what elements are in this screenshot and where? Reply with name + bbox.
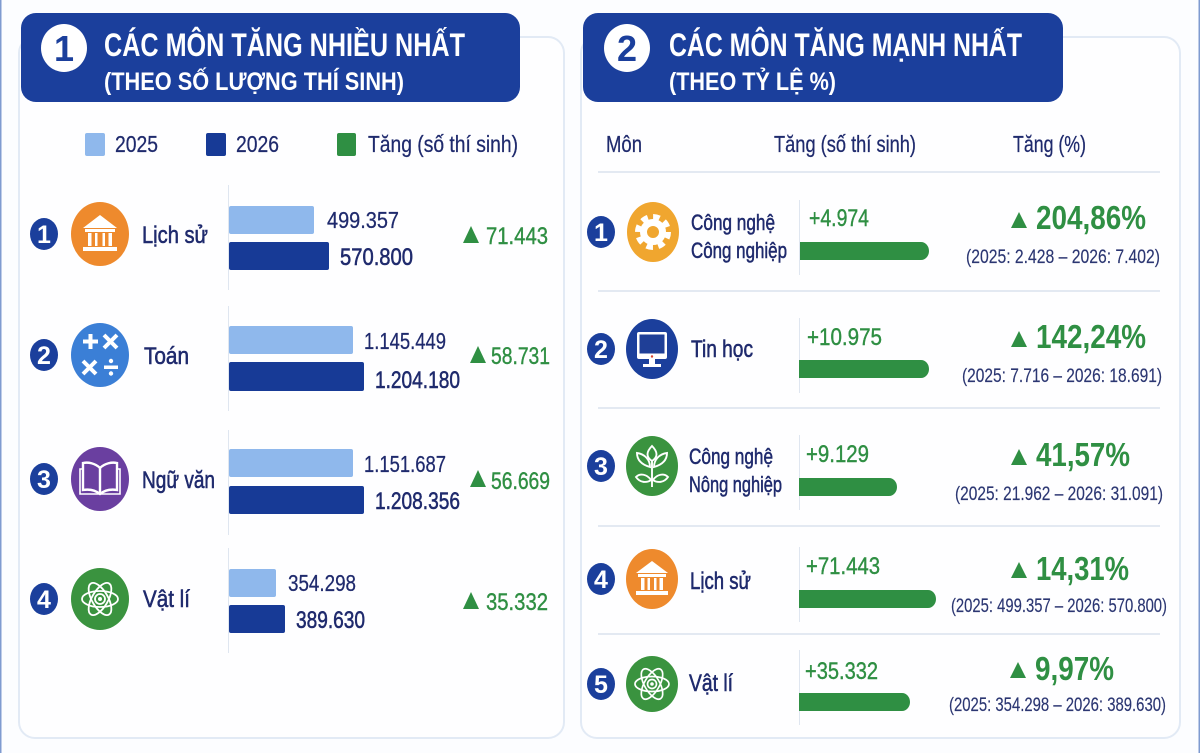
row: Lịch sử: 71.443 [486, 223, 548, 250]
row: Lịch sử percent: 4 [594, 566, 608, 594]
row: Vật lí percent: 9,97% [1035, 650, 1114, 687]
column headers [606, 131, 1086, 157]
row: Toán: 1.204.180 [375, 367, 460, 394]
row: Công nghệ Nông nghiệp: 41,57% [1036, 436, 1130, 473]
row: Công nghệ Công nghiệp [587, 199, 1160, 275]
row: Công nghệ Công nghiệp: Công nghiệp [691, 238, 787, 263]
row: Lịch sử [30, 185, 548, 290]
icon: atom [626, 656, 678, 712]
row: Lịch sử percent: Lịch sử [690, 568, 751, 595]
header banner: CÁC MÔN TĂNG MẠNH NHẤT [669, 27, 1022, 63]
row: Công nghệ Công nghiệp: +4.974 [809, 205, 869, 232]
row: Toán: Toán [144, 343, 189, 370]
header banner [583, 13, 1063, 102]
row: Tin học [587, 318, 1162, 393]
row: Công nghệ Nông nghiệp: Công nghệ [689, 444, 773, 469]
header banner [21, 13, 520, 102]
panel: most increased by candidates [19, 13, 564, 738]
panel card [581, 37, 1180, 738]
column headers: Tăng (%) [1013, 131, 1086, 157]
row: Công nghệ Công nghiệp: 204,86% [1036, 199, 1146, 236]
row: Ngữ văn [30, 430, 550, 535]
row: Vật lí percent [587, 650, 1166, 725]
row: Ngữ văn: Ngữ văn [142, 467, 215, 494]
row: Vật lí percent: Vật lí [689, 670, 733, 697]
row: Tin học: (2025: 7.716 – 2026: 18.691) [962, 366, 1162, 387]
icon: computer monitor [626, 319, 678, 379]
row: Ngữ văn: 56.669 [491, 468, 550, 495]
header banner: 1 [54, 28, 74, 69]
row: Vật lí: 4 [37, 586, 51, 614]
icon: math symbols [71, 323, 129, 387]
icon: atom [71, 568, 129, 630]
row: Lịch sử percent: 14,31% [1036, 550, 1129, 587]
legend: Tăng (số thí sinh) [368, 131, 518, 157]
row: Vật lí: 35.332 [486, 589, 548, 616]
row: Tin học: Tin học [691, 336, 753, 363]
row: Tin học: +10.975 [807, 324, 882, 351]
row: Lịch sử percent: +71.443 [806, 553, 880, 580]
row: Ngữ văn: 3 [37, 466, 51, 494]
row: Vật lí percent: 5 [594, 671, 608, 699]
icon: plant [626, 436, 678, 496]
header banner: (THEO SỐ LƯỢNG THÍ SINH) [104, 66, 404, 96]
row: Lịch sử: Lịch sử [142, 222, 208, 249]
header banner: CÁC MÔN TĂNG NHIỀU NHẤT [104, 27, 465, 63]
panel card [19, 37, 564, 738]
row: Công nghệ Nông nghiệp: +9.129 [806, 441, 869, 468]
row: Lịch sử: 1 [37, 221, 51, 249]
row: Công nghệ Công nghiệp: (2025: 2.428 – 2026: 7.402) [966, 247, 1160, 268]
row: Ngữ văn: 1.208.356 [375, 488, 460, 515]
row: Công nghệ Nông nghiệp: Nông nghiệp [689, 472, 782, 497]
row: Công nghệ Nông nghiệp [587, 435, 1163, 510]
legend [85, 131, 518, 157]
row: Vật lí: 354.298 [288, 570, 356, 596]
header banner: (THEO TỶ LỆ %) [669, 66, 836, 96]
row: Công nghệ Nông nghiệp: 3 [594, 453, 608, 481]
header banner: 2 [617, 28, 637, 69]
legend: 2025 [115, 131, 158, 157]
row: Tin học: 142,24% [1036, 318, 1146, 355]
row: Tin học: 2 [594, 336, 608, 364]
row: Toán: 2 [37, 342, 51, 370]
row: Lịch sử: 499.357 [327, 207, 399, 233]
column headers: Tăng (số thí sinh) [774, 131, 916, 157]
row: Toán: 58.731 [491, 343, 550, 370]
icon: gear [627, 202, 679, 262]
legend: 2026 [236, 131, 279, 157]
row: Toán: 1.145.449 [364, 328, 446, 354]
row: Ngữ văn: 1.151.687 [364, 451, 446, 477]
row: Công nghệ Công nghiệp: 1 [594, 219, 608, 247]
icon: open book [71, 447, 129, 511]
row: Lịch sử percent [587, 547, 1167, 622]
row: Vật lí: Vật lí [143, 586, 190, 613]
row: Vật lí: 389.630 [296, 607, 365, 634]
row: Công nghệ Công nghiệp: Công nghệ [691, 210, 775, 235]
column headers: Môn [606, 131, 642, 157]
row: Toán [30, 306, 550, 411]
row: Vật lí percent: +35.332 [805, 658, 878, 685]
row: Vật lí [30, 548, 548, 653]
panel: strongest increase by percent [581, 13, 1180, 738]
row: Lịch sử: 570.800 [340, 244, 413, 271]
icon: museum [71, 202, 129, 266]
icon: museum [626, 549, 678, 609]
